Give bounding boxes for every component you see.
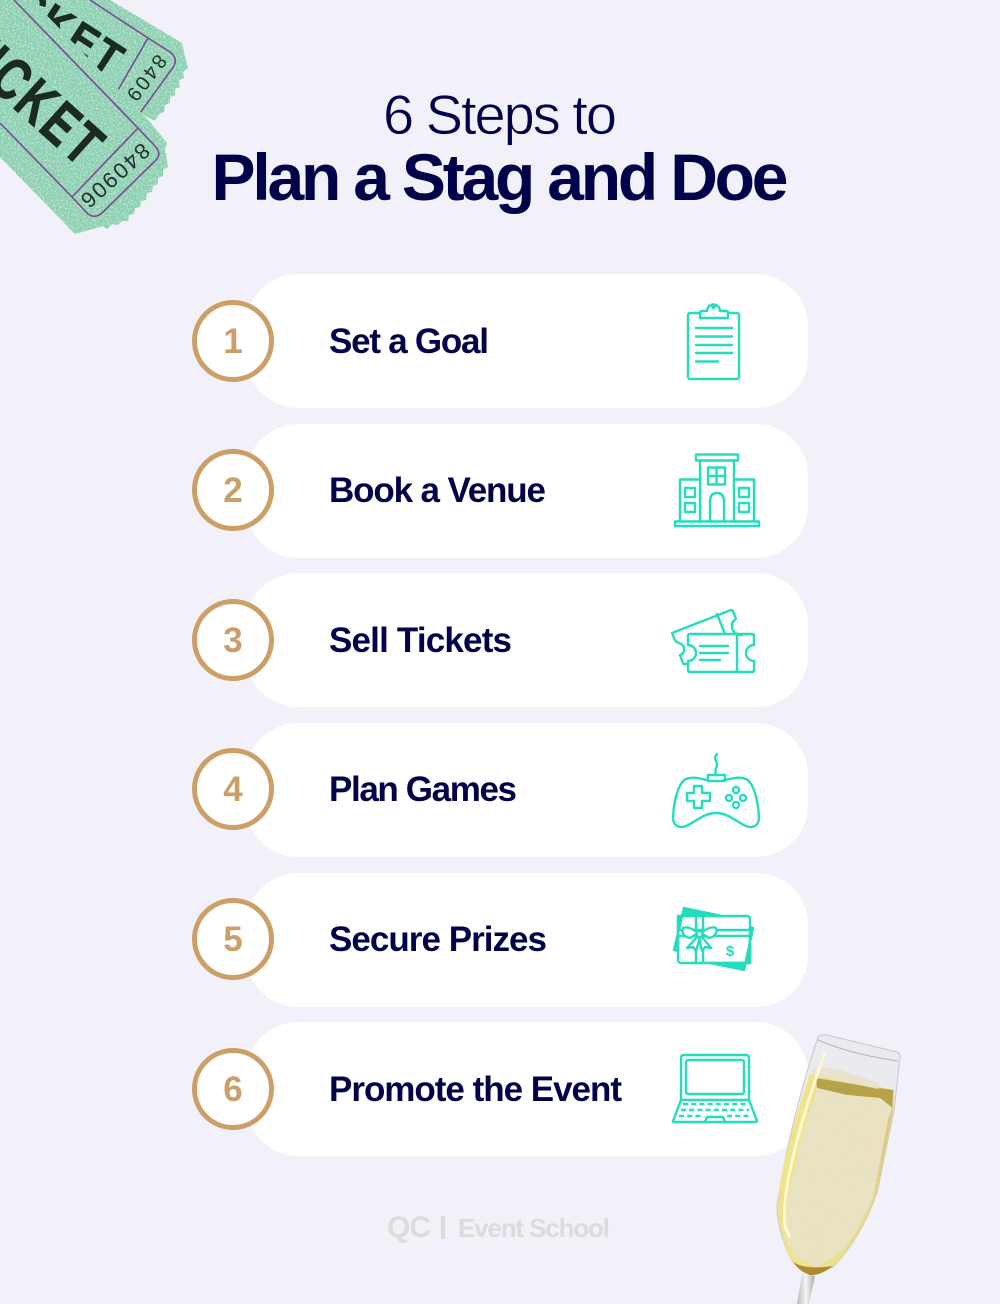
step 3: sell tickets: 3 [223, 621, 243, 660]
front ticket: 840906 [76, 138, 155, 213]
glass bowl [777, 1035, 900, 1273]
icon: tickets [672, 610, 754, 672]
step 5: secure prizes [194, 873, 808, 1007]
icon: building [675, 454, 759, 526]
back ticket: 8409 [122, 50, 171, 105]
step 2: book a venue: 2 [223, 471, 243, 510]
bottom of liquid [793, 1262, 833, 1275]
image: raffle tickets [0, 0, 188, 234]
step 5: secure prizes: 5 [223, 920, 243, 959]
surface band [816, 1078, 893, 1107]
step 1: set a goal [194, 274, 808, 408]
title [212, 83, 788, 214]
front ticket [0, 0, 168, 234]
champagne [778, 1074, 894, 1273]
back ticket [0, 0, 188, 121]
step 1: set a goal: 1 [223, 322, 243, 361]
step 6: promote the event: Promote the Event [329, 1070, 622, 1109]
foam [810, 1067, 880, 1089]
icon: laptop [673, 1055, 757, 1122]
icon: game controller [673, 754, 759, 827]
highlight [784, 1053, 825, 1237]
icon: clipboard [688, 305, 739, 379]
step 3: sell tickets: Sell Tickets [329, 621, 512, 660]
logo: QC Event School: Event School [458, 1213, 610, 1243]
step 5: secure prizes: Secure Prizes [329, 920, 547, 959]
rim [818, 1040, 898, 1061]
step 4: plan games: 4 [223, 770, 243, 809]
step 6: promote the event: 6 [223, 1070, 243, 1109]
stem [797, 1274, 815, 1304]
step 2: book a venue: Book a Venue [329, 471, 546, 510]
title: 6 Steps to [383, 83, 617, 146]
title: Plan a Stag and Doe [212, 140, 788, 214]
step 6: promote the event [194, 1022, 808, 1156]
bubbles [785, 1088, 892, 1268]
step 3: sell tickets [194, 573, 808, 707]
step 4: plan games: Plan Games [329, 770, 517, 809]
icon: gift card: $ [726, 943, 735, 960]
logo: QC Event School: QC [387, 1211, 431, 1244]
step 1: set a goal: Set a Goal [329, 322, 489, 361]
icon: gift card [674, 908, 753, 970]
step 2: book a venue [194, 424, 808, 558]
image: champagne flute [777, 1035, 900, 1304]
step 4: plan games [194, 723, 808, 857]
logo: QC Event School [387, 1211, 610, 1244]
